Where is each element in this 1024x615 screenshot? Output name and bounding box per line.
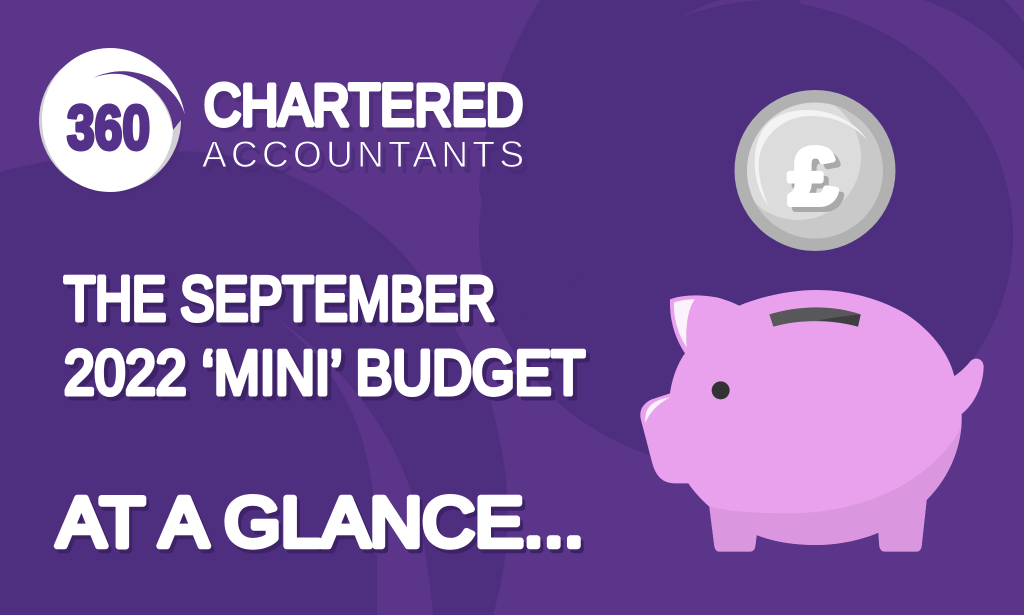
icon: piggy bank bbox=[640, 290, 984, 553]
background: light crescent bbox=[263, 310, 433, 615]
coin slot bbox=[769, 307, 861, 327]
logo number: 360 bbox=[67, 94, 150, 163]
background: top-right band bbox=[924, 0, 1024, 70]
icon: pound coin bbox=[734, 90, 896, 251]
background: left dark shape bbox=[0, 151, 508, 615]
logo wordmark: ACCOUNTANTS bbox=[202, 134, 524, 175]
pig belly shade bbox=[708, 423, 963, 553]
heading: the september 2022 mini budget: 2022 ‘MINI’ BUDGET bbox=[68, 343, 589, 412]
coin highlight bbox=[755, 110, 867, 205]
background: right dark ellipse bbox=[479, 0, 1013, 471]
heading: the september 2022 mini budget: THE SEPTEMBER bbox=[64, 265, 495, 334]
logo wordmark: ACCOUNTANTS bbox=[207, 140, 529, 181]
pound sign: £ bbox=[794, 137, 842, 226]
background: top sliver bbox=[675, 0, 764, 20]
heading: the september 2022 mini budget: THE SEPTEMBER bbox=[68, 269, 499, 338]
logo mark bbox=[39, 48, 185, 195]
snout highlight bbox=[645, 397, 670, 423]
background: upper-left of right dark shape bbox=[479, 0, 800, 320]
logo wordmark: CHARTERED bbox=[208, 77, 527, 142]
heading: at a glance: AT A GLANCE... bbox=[57, 483, 584, 561]
logo wordmark bbox=[202, 73, 529, 181]
heading: the september 2022 mini budget bbox=[64, 265, 589, 412]
ear highlight bbox=[674, 299, 695, 347]
pig body bbox=[640, 290, 984, 552]
heading: at a glance: AT A GLANCE... bbox=[60, 487, 587, 565]
pound sign: £ bbox=[789, 132, 837, 221]
logo bbox=[39, 48, 529, 195]
pig eye bbox=[712, 381, 730, 399]
heading: the september 2022 mini budget: 2022 ‘MINI’ BUDGET bbox=[64, 339, 585, 408]
logo wordmark: CHARTERED bbox=[204, 73, 523, 138]
